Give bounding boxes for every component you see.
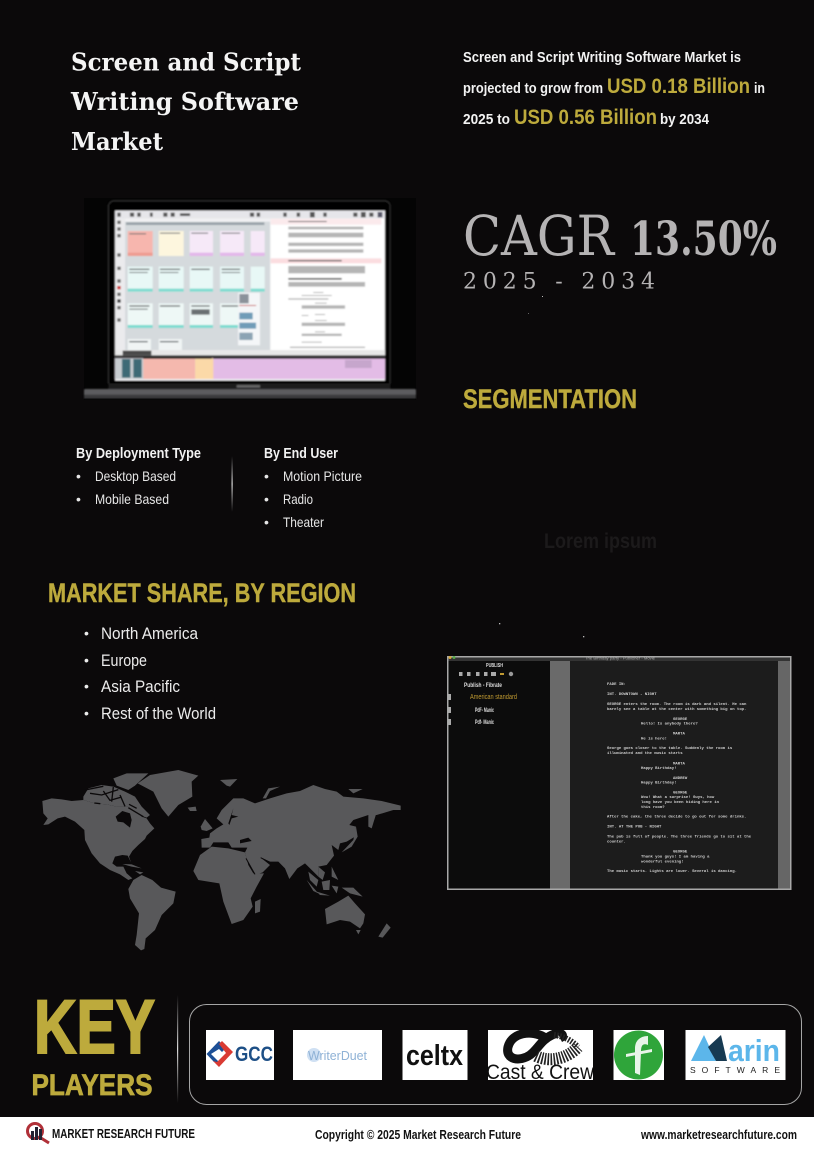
title: Writing Software	[70, 87, 299, 116]
placeholder text: Lorem ipsum	[544, 530, 657, 553]
script page	[271, 219, 385, 350]
screenplay text: ANDREW	[673, 777, 688, 781]
region list: Asia Pacific	[101, 677, 180, 696]
sidebar text: PUBLISH	[486, 663, 503, 669]
Eurasia, Africa and Oceania	[193, 779, 401, 938]
sidebar text: Publish - Fibrate	[464, 683, 503, 689]
logo: Marin Software	[686, 1030, 786, 1080]
region list: Rest of the World	[101, 704, 216, 723]
Americas and Greenland	[42, 770, 198, 950]
market share heading: MARKET SHARE, BY REGION	[48, 578, 356, 608]
footer	[0, 1117, 814, 1150]
market projection text: by 2034	[660, 111, 710, 128]
region list: •	[84, 678, 89, 694]
screenplay text: INT. DOWNTOWN - NIGHT	[607, 693, 657, 697]
logo: Marin Software: SOFTWARE	[690, 1065, 780, 1075]
screenplay text: this room?	[641, 805, 665, 810]
market projection text: USD 0.56 Billion	[514, 106, 657, 129]
region list: •	[84, 652, 89, 668]
screenplay text: After the cake, the three decide to go out for some drinks.	[607, 814, 746, 820]
segment: end user: •	[264, 514, 269, 530]
screenplay text: GEORGE	[673, 718, 688, 722]
popup menu	[238, 293, 260, 345]
market projection text: 2025 to	[463, 111, 510, 128]
laptop base	[84, 389, 416, 398]
key players panel	[190, 1004, 802, 1104]
screenplay text: Wow! What a surprise! Guys, how	[641, 795, 715, 800]
segment: end user: •	[264, 491, 269, 507]
screenplay text: Happy Birthday!	[641, 766, 676, 771]
screenplay text: INT. AT THE PUB - NIGHT	[607, 826, 662, 830]
row one cards	[128, 231, 265, 256]
market projection text	[463, 49, 765, 129]
logo: Cast and Crew: Cast & Crew	[486, 1061, 595, 1084]
CAGR: CAGR	[463, 204, 615, 268]
world map	[42, 770, 401, 950]
logo: celtx: celtx	[406, 1040, 463, 1072]
logo: GCC: GCC	[235, 1043, 273, 1066]
key players heading: KEY	[34, 985, 155, 1070]
screenplay text: GEORGE	[673, 850, 688, 854]
segment: end user: •	[264, 468, 269, 484]
logo: Final Draft	[614, 1030, 664, 1080]
screenplay text: George goes closer to the table. Suddenly the room is	[607, 746, 733, 751]
market projection text: Screen and Script Writing Software Market is	[463, 49, 741, 66]
screenplay text	[607, 683, 752, 874]
segment: end user: Motion Picture	[283, 468, 362, 484]
screenplay text: Thank you guys! I am having a	[641, 854, 710, 860]
segment: end user: Radio	[283, 491, 313, 507]
segment: deployment type: •	[76, 491, 81, 507]
title	[70, 48, 301, 156]
segment: end user: By End User	[264, 445, 338, 462]
laptop screenshot	[84, 198, 416, 400]
screenplay text: FADE IN:	[607, 683, 626, 687]
segment: end user	[264, 445, 362, 530]
market projection text: projected to grow from	[463, 80, 603, 97]
logo: celtx	[402, 1030, 468, 1080]
key players heading: PLAYERS	[32, 1069, 152, 1102]
row two cards	[128, 267, 265, 292]
screenplay text: counter.	[607, 840, 626, 844]
logo: GCC	[206, 1030, 274, 1080]
screenplay text: MARTA	[673, 732, 685, 736]
script editor screenshot: The Birthday party - Publisher - Movie	[585, 656, 656, 660]
market projection text: USD 0.18 Billion	[607, 75, 750, 98]
title: Market	[71, 127, 163, 156]
screenplay text: MARTA	[673, 762, 685, 766]
region list: •	[84, 705, 89, 721]
screenplay text: He is here!	[641, 736, 667, 742]
footer: MARKET RESEARCH FUTURE	[52, 1127, 195, 1141]
logo: Cast and Crew	[488, 1030, 593, 1080]
screenplay text: Happy Birthday!	[641, 780, 676, 786]
market projection text: in	[754, 80, 765, 97]
sidebar text: PdF- Manic	[475, 708, 494, 714]
screenplay text: illuminated and the music starts	[607, 751, 683, 756]
sidebar text: American standard	[470, 694, 517, 701]
CAGR	[463, 204, 777, 294]
title: Screen and Script	[71, 48, 301, 76]
screenplay text: GEORGE	[673, 792, 688, 796]
screenplay text: Hello! Is anybody there?	[641, 722, 698, 726]
row three cards	[128, 303, 244, 350]
segmentation heading: SEGMENTATION	[463, 384, 637, 414]
segment: deployment type: •	[76, 468, 81, 484]
segment: deployment type: By Deployment Type	[76, 445, 201, 462]
logo: WriterDuet	[293, 1030, 382, 1080]
region list: North America	[101, 624, 198, 643]
logo: Marin Software: arin	[728, 1033, 780, 1068]
footer: Copyright © 2025 Market Research Future	[315, 1128, 521, 1142]
script editor screenshot	[447, 656, 792, 890]
screenplay text: long have you been hiding here in	[641, 800, 720, 805]
segment: end user: Theater	[283, 514, 324, 530]
timeline	[115, 350, 385, 379]
screenplay text: The music starts. Lights are lower. Several is dancing.	[607, 869, 737, 874]
logo: WriterDuet: WriterDuet	[308, 1049, 368, 1063]
footer logo	[28, 1124, 49, 1143]
region list: •	[84, 625, 89, 641]
sidebar text	[448, 663, 517, 726]
segment: deployment type: Mobile Based	[95, 491, 169, 507]
sidebar text: Pdf- Manic	[475, 720, 494, 726]
region list: Europe	[101, 651, 147, 670]
key players heading	[32, 985, 155, 1102]
segment: deployment type	[76, 445, 201, 507]
CAGR: 2025 - 2034	[463, 270, 655, 294]
screenplay text: GEORGE enters the room. The room is dark and silent. He can	[607, 702, 747, 707]
segment: deployment type: Desktop Based	[95, 468, 176, 484]
screenplay text: The pub is full of people. The three friends go to sit at the	[607, 834, 752, 840]
region list	[84, 624, 216, 723]
screenplay text: wonderful evening!	[641, 860, 684, 864]
screenplay text: barely see a table at the center with something big on top.	[607, 707, 746, 712]
